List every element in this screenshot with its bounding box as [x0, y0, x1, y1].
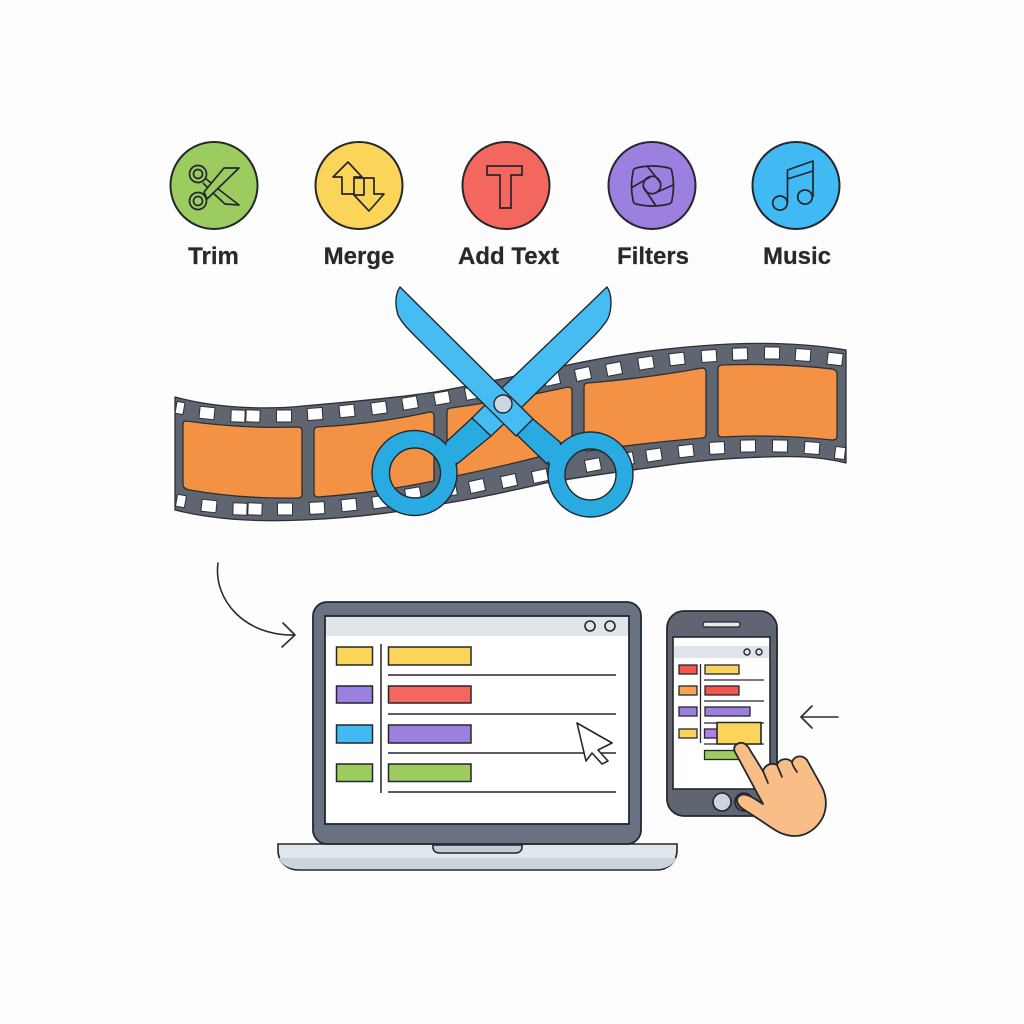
phone window controls [744, 649, 762, 655]
upper-right blade [472, 287, 611, 436]
phone screen [673, 637, 770, 789]
feature: music: Music [763, 243, 831, 270]
window title bar [326, 617, 628, 636]
dragged yellow clip [717, 722, 761, 744]
feature: merge [316, 142, 402, 270]
strip body [175, 343, 846, 521]
icon: music notes [773, 161, 813, 210]
feature: add text [458, 142, 559, 270]
feature: filters: Filters [617, 243, 689, 270]
hand tapping phone [734, 743, 826, 836]
feature: music [752, 142, 840, 270]
feature: filters [608, 142, 696, 270]
laptop [278, 602, 677, 870]
large scissors [372, 287, 633, 517]
right handle and ring [517, 419, 633, 517]
mouse cursor [577, 723, 612, 764]
laptop lid [313, 602, 641, 844]
phone body [667, 611, 777, 816]
feature: trim [170, 142, 258, 270]
home button [713, 793, 731, 811]
second button [735, 793, 753, 811]
phone title bar [674, 646, 769, 658]
upper-left blade [396, 287, 533, 436]
window controls [585, 621, 615, 631]
left handle and ring [372, 418, 491, 516]
laptop screen [325, 616, 629, 824]
icon: aperture [631, 166, 674, 206]
feature: trim: Trim [188, 243, 239, 270]
editor tracks [336, 644, 616, 793]
film frames [183, 364, 837, 498]
phone speaker [703, 622, 740, 627]
icon: letter T shape [487, 166, 522, 208]
sprocket holes [175, 347, 846, 515]
left-pointing arrow to phone [801, 706, 838, 728]
pivot screw [494, 395, 512, 413]
icon: merge arrows [333, 162, 384, 211]
phone [667, 611, 777, 816]
laptop base [278, 844, 677, 870]
icon: small scissors [190, 166, 239, 210]
feature: add text: Add Text [458, 243, 559, 270]
feature icon row [170, 142, 840, 270]
phone tracks [679, 664, 764, 760]
feature: merge: Merge [324, 243, 394, 270]
finger creases [763, 762, 797, 783]
film strip [175, 343, 846, 521]
curved arrow to laptop [217, 563, 295, 647]
